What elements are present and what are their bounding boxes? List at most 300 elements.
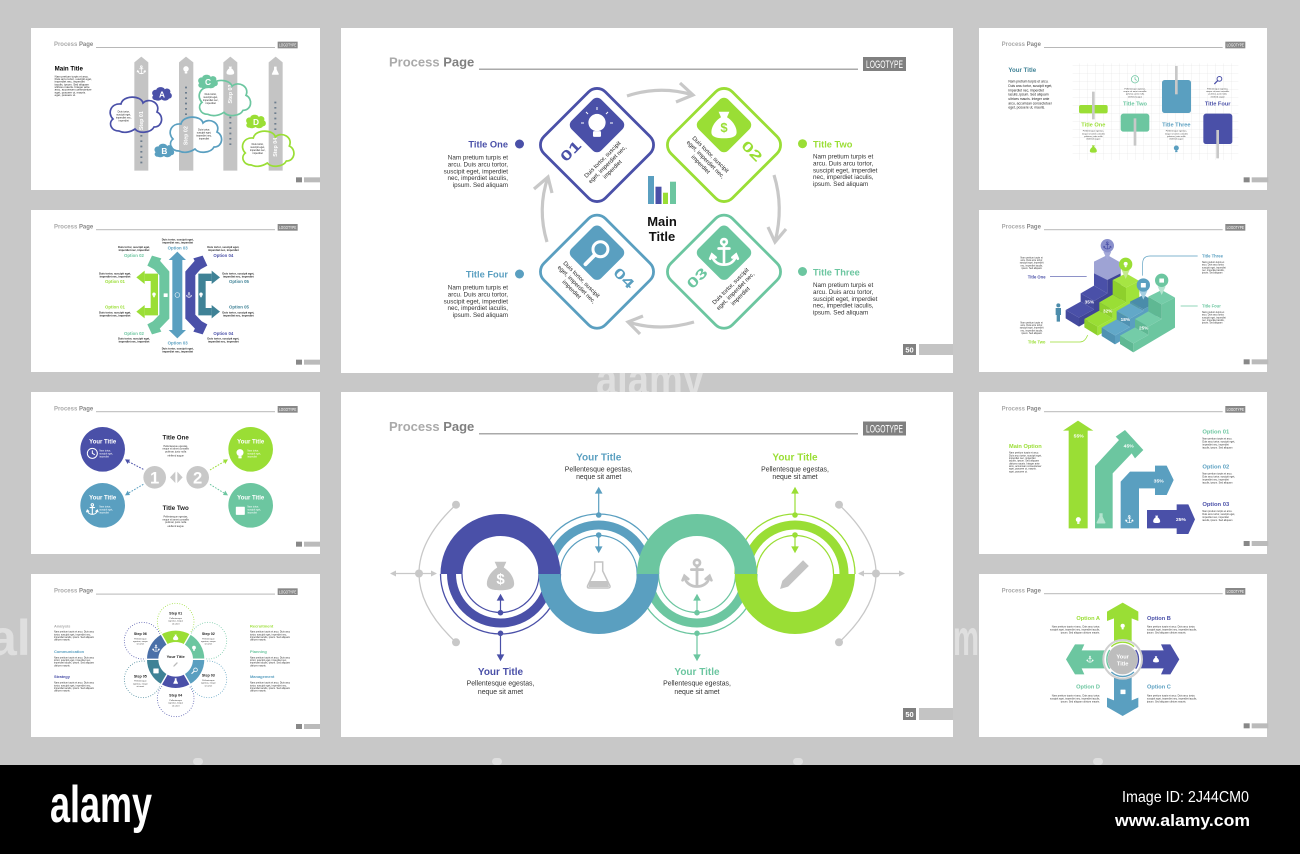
circle: blue: suscipit eget, — [99, 509, 113, 512]
option text: Duis tortor, suscipit eget, — [99, 271, 131, 275]
left text column: ultrices mauris. — [54, 690, 71, 693]
title four: ipsum. Sed aliquam — [1202, 323, 1223, 325]
left text column: Nam pretium turpis et arcu. Duis arcu — [54, 656, 95, 659]
main option: iaculis, ipsum. Sed aliquam — [1009, 460, 1039, 463]
alamy logo: alamy — [50, 776, 152, 834]
title three: suscipit eget, imperdiet — [1202, 266, 1226, 269]
arrow heads — [125, 459, 228, 495]
option labels — [105, 245, 250, 346]
title three: nec, imperdiet iaculis, — [1202, 269, 1225, 272]
header: Process Page — [1002, 406, 1042, 412]
letter badges — [152, 75, 266, 157]
side arcs — [392, 505, 903, 642]
title one: arcu. Duis arcu tortor, — [448, 162, 508, 168]
ring icons — [153, 635, 197, 684]
option 01 — [1202, 430, 1235, 450]
grid text: pulvinar, justo nulla — [1126, 93, 1145, 96]
option d: suscipit eget, imperdiet nec, imperdiet iaculis, — [1050, 697, 1100, 700]
teal bracket arrow — [202, 271, 220, 318]
title four: suscipit eget, imperdiet — [444, 298, 508, 306]
option text: imperdiet nec, imperdiet — [208, 248, 239, 252]
cloud text: Duis tortor, — [205, 93, 217, 96]
circle: purple — [80, 427, 125, 472]
website: www.alamy.com — [1114, 811, 1250, 830]
option labels: Option 01 — [105, 279, 126, 284]
header: Process Page — [1002, 588, 1042, 594]
your title text: Duis arcu tortor, suscipit eget, — [1008, 84, 1052, 88]
circle: purple: suscipit eget, — [99, 453, 113, 456]
percent labels: 25% — [1139, 325, 1149, 330]
title two: eleifend augue — [168, 525, 184, 528]
title one: neque sit amet convallis — [162, 448, 190, 451]
percent labels: 18% — [1121, 317, 1131, 322]
title four — [1202, 304, 1226, 325]
title two: suscipit eget, imperdiet — [1020, 327, 1044, 330]
title one: nec, imperdiet iaculis, — [447, 175, 508, 182]
title one: Pellentesque egestas, — [163, 445, 188, 448]
circle: purple: Your Title — [89, 440, 117, 446]
grid titles: Title One — [1081, 122, 1105, 128]
option a: suscipit eget, imperdiet nec, imperdiet iaculis, — [1050, 629, 1100, 632]
option b: Option B — [1147, 616, 1171, 622]
circle: green: Your Title — [237, 440, 265, 446]
header: LOGOTYPE — [1227, 589, 1244, 594]
diamond 04: eget, imperdiet nec, — [556, 265, 596, 305]
label: purple title: neque sit amet — [478, 689, 523, 696]
left text column: tortor, suscipit eget, imperdiet nec, — [54, 633, 91, 636]
diamond 03: 03 — [683, 264, 711, 292]
header: LOGOTYPE — [279, 589, 296, 594]
title four: ipsum. Sed aliquam — [453, 312, 508, 319]
page number: 50 — [905, 710, 914, 719]
title two: ipsum. Sed aliquam — [1021, 333, 1042, 335]
right text column — [250, 623, 291, 693]
option 01: imperdiet nec, imperdiet — [1202, 444, 1229, 447]
option text: Duis tortor, suscipit eget, — [118, 245, 150, 249]
option 02: imperdiet nec, imperdiet — [1202, 478, 1229, 481]
header: Process Page — [389, 54, 474, 70]
label: blue title — [565, 452, 633, 481]
circle: green: Nam tortor, — [247, 450, 259, 453]
header — [1002, 42, 1245, 48]
green arrow — [1063, 421, 1093, 528]
connector lines — [1050, 256, 1198, 342]
left text column: ultrices mauris. — [54, 639, 71, 642]
step labels: sit amet — [205, 684, 213, 687]
centre hub — [1103, 640, 1142, 679]
main title — [647, 214, 677, 244]
step labels: Step 05 — [134, 674, 147, 678]
left text column: ultrices mauris. — [54, 664, 71, 667]
diamond 02: $ — [720, 120, 728, 135]
cloud text: suscipit eget, — [116, 113, 131, 116]
diamond 04: 04 — [610, 264, 638, 292]
label: blue title: neque sit amet — [576, 474, 621, 481]
grid text: Pellentesque egestas, — [1207, 87, 1229, 90]
mint stairs — [1120, 290, 1175, 352]
title one: arcu. Duis arcu tortor, — [1021, 259, 1043, 262]
step labels: Pellentesque — [169, 699, 183, 702]
left text column: Nam pretium turpis et arcu. Duis arcu — [54, 682, 95, 685]
cloud text: imperdiet — [199, 137, 209, 140]
header — [54, 588, 298, 595]
diamond 01: eget, imperdiet nec, — [588, 145, 628, 185]
step labels: egestas, neque — [133, 682, 149, 685]
panel: linked rings — [341, 392, 953, 737]
right text column: Recruitment — [250, 623, 274, 628]
option text: imperdiet nec, imperdiet — [119, 340, 149, 344]
grid icons — [1090, 76, 1222, 153]
letter badges: B — [161, 146, 167, 156]
header: LOGOTYPE — [1227, 407, 1244, 412]
right text column: tortor, suscipit eget, imperdiet nec, — [250, 633, 287, 636]
main title text: ultrices mauris. Integer ante — [55, 85, 90, 89]
option 03: Nam pretium turpis et arcu. — [1202, 510, 1233, 513]
ring icons — [487, 560, 809, 590]
option 01: Option 01 — [1202, 430, 1230, 436]
watermark fragments — [0, 353, 1103, 765]
diamond 01: imperdiet — [602, 159, 624, 181]
page number — [903, 708, 953, 720]
option c — [1147, 685, 1197, 703]
watermark fragments: alamy — [596, 353, 704, 405]
page number — [296, 360, 320, 365]
grid titles: Title Three — [1162, 122, 1191, 128]
right text column: Nam pretium turpis et arcu. Duis arcu — [250, 631, 291, 634]
title two: Pellentesque egestas, — [163, 516, 188, 519]
diamond 04 — [535, 210, 659, 333]
circle: mint: Nam tortor, — [247, 506, 259, 509]
main option — [1009, 444, 1042, 473]
percent labels: 55% — [1074, 434, 1084, 440]
title one: ipsum. Sed aliquam — [453, 182, 508, 189]
header: LOGOTYPE — [866, 424, 903, 436]
label: mint title: Pellentesque egestas, — [663, 680, 731, 688]
letter badges: C — [205, 77, 211, 87]
mint bent arrow — [147, 256, 164, 334]
option a: Option A — [1076, 616, 1100, 622]
step labels: sit amet — [205, 643, 213, 646]
your title text: Your Title — [1008, 67, 1037, 74]
grid text: Pellentesque egestas, — [1083, 130, 1104, 133]
option 03 — [1202, 502, 1235, 522]
option text: Duis tortor, suscipit eget, — [99, 311, 131, 315]
label: mint title — [663, 667, 731, 696]
cloud text: suscipit eget, — [197, 131, 212, 134]
title three: arcu. Duis arcu tortor, — [813, 289, 873, 296]
grid text: eleifend augue — [1211, 96, 1226, 98]
title one: Nam pretium turpis et — [448, 154, 508, 162]
option d: Option D — [1076, 685, 1100, 691]
percent labels: 45% — [1124, 444, 1134, 450]
header: LOGOTYPE — [279, 43, 296, 48]
option text: Duis tortor, suscipit eget, — [118, 337, 150, 341]
option labels: Option 05 — [229, 279, 250, 284]
outline clouds — [110, 80, 294, 166]
main title text: arcu, accumsan consectetuer — [55, 88, 92, 92]
option text — [99, 238, 255, 353]
side nodes — [390, 501, 905, 646]
main title text: Main Title — [55, 65, 84, 72]
page number — [296, 177, 320, 182]
option text: Duis tortor, suscipit eget, — [162, 346, 194, 350]
step labels: sit amet — [137, 685, 145, 688]
title two: neque sit amet convallis — [162, 518, 190, 521]
cloud text: imperdiet nec, — [203, 99, 219, 102]
option b: Nam pretium turpis et arcu. Duis arcu tortor, — [1147, 626, 1195, 629]
main option: Main Option — [1009, 444, 1042, 450]
title two: pulvinar, justo nulla — [165, 521, 187, 524]
header: LOGOTYPE — [279, 407, 296, 412]
header — [1002, 406, 1245, 413]
main title text — [55, 65, 92, 97]
title two — [798, 139, 878, 188]
purple bent arrow — [190, 256, 207, 334]
arrow icons — [152, 292, 203, 297]
percent labels — [1085, 300, 1149, 330]
percent labels — [1074, 434, 1187, 523]
option text: imperdiet nec, imperdiet — [100, 314, 130, 318]
option labels: Option 02 — [124, 331, 145, 336]
title two: nec, imperdiet iaculis, — [813, 174, 874, 181]
panel: ten options arrows — [31, 210, 320, 372]
header — [1002, 224, 1245, 231]
title one: Title One — [163, 434, 189, 441]
option c: suscipit eget, imperdiet nec, imperdiet iaculis, — [1147, 697, 1197, 700]
main option: eget, posuere ut. — [1009, 470, 1028, 473]
option labels: Option 01 — [105, 305, 126, 310]
label: purple title: Your Title — [478, 667, 524, 678]
step labels: Pellentesque — [202, 679, 215, 682]
right text column: ultrices mauris. — [250, 639, 267, 642]
right text column: imperdiet iaculis, ipsum. Sed aliquam — [250, 636, 290, 639]
title three — [798, 267, 878, 316]
step labels: egestas, neque — [201, 640, 217, 643]
header — [54, 42, 298, 48]
grid text: Pellentesque egestas, — [1124, 87, 1146, 90]
grid text: neque sit amet convallis — [1123, 90, 1147, 93]
option text: Duis tortor, suscipit eget, — [222, 271, 255, 275]
label: mint title: Your Title — [674, 667, 720, 678]
grid text: eleifend augue — [1086, 139, 1101, 141]
option a — [1050, 616, 1100, 635]
title one: Title One — [1028, 275, 1046, 280]
numbered circles: 1 — [150, 468, 159, 487]
your title text: eget, posuere ut, mauris. — [1008, 106, 1045, 110]
grid text: pulvinar, justo nulla — [1208, 93, 1228, 96]
circle: purple: imperdiet — [99, 456, 109, 459]
circle: green — [228, 427, 273, 472]
step labels — [139, 84, 279, 157]
circle: purple: Nam tortor, — [99, 450, 111, 453]
option b — [1147, 616, 1197, 635]
page number — [296, 542, 320, 547]
page number — [1244, 541, 1268, 546]
arrow icons — [1087, 624, 1159, 694]
left text column: imperdiet iaculis, ipsum. Sed aliquam — [54, 687, 94, 690]
grey step arrows — [134, 57, 283, 171]
watermark fragments: m — [953, 610, 979, 666]
circle: mint: imperdiet — [247, 512, 257, 515]
thin ring parts — [440, 514, 855, 634]
dashed petals — [124, 603, 227, 717]
title three: ipsum. Sed aliquam — [813, 310, 868, 316]
circle: blue: Your Title — [89, 496, 117, 502]
label: green title: Pellentesque egestas, — [761, 466, 829, 474]
left text column: Strategy — [54, 674, 71, 679]
option c: Nam pretium turpis et arcu. Duis arcu tortor, — [1147, 694, 1195, 697]
option 02: Nam pretium turpis et arcu. — [1202, 472, 1233, 475]
step labels: sit amet — [172, 622, 180, 625]
grid text: pulvinar, justo nulla — [1167, 135, 1186, 138]
grid text: pulvinar, justo nulla — [1084, 135, 1103, 138]
title one: Nam pretium turpis et — [1021, 256, 1043, 259]
circle: green: suscipit eget, — [247, 453, 261, 456]
option 03: iaculis, ipsum. Sed aliquam — [1202, 519, 1232, 522]
title three: Title Three — [1202, 254, 1224, 259]
option labels: Option 03 — [168, 341, 188, 346]
pins — [1101, 239, 1168, 300]
step labels: Step 01 — [169, 612, 182, 616]
main option: imperdiet nec, imperdiet — [1009, 457, 1036, 460]
option text: imperdiet nec, imperdiet — [119, 248, 149, 252]
left text column: imperdiet iaculis, ipsum. Sed aliquam — [54, 636, 94, 639]
title two: Title Two — [1028, 339, 1046, 344]
diamond 02: imperdiet — [689, 154, 711, 176]
circle: blue: Nam tortor, — [99, 506, 111, 509]
title four: Nam pretium turpis et — [448, 284, 508, 292]
right text column: imperdiet iaculis, ipsum. Sed aliquam — [250, 662, 290, 665]
title one — [162, 434, 190, 457]
step labels — [133, 612, 217, 707]
label: purple title: Pellentesque egestas, — [467, 680, 534, 688]
step labels: Pellentesque — [134, 637, 147, 640]
cloud text: Duis tortor, — [198, 128, 210, 131]
option labels: Option 04 — [213, 253, 234, 258]
step labels: Step 02 — [184, 126, 190, 145]
cycle arrows — [534, 83, 786, 334]
option c: ipsum. Sed aliquam ultrices mauris. — [1147, 700, 1187, 703]
your title text — [1008, 67, 1053, 110]
title one: suscipit eget, imperdiet — [1020, 262, 1044, 265]
chevron columns — [141, 87, 275, 163]
diamond 03: imperdiet — [730, 286, 752, 307]
left text column: Analysis — [54, 623, 71, 628]
option 02 — [1202, 464, 1235, 484]
circle: blue: imperdiet — [99, 512, 109, 515]
cloud text: imperdiet nec, — [116, 116, 132, 119]
letter badges: D — [253, 117, 259, 127]
option labels: Option 04 — [213, 331, 234, 336]
green bracket arrow — [136, 271, 154, 318]
option d: ipsum. Sed aliquam ultrices mauris. — [1061, 700, 1100, 703]
step labels: Step 03 — [228, 84, 234, 103]
title one — [1020, 256, 1046, 280]
cloud text: imperdiet — [206, 102, 216, 105]
header: Process Page — [54, 42, 94, 48]
option a: Nam pretium turpis et arcu. Duis arcu tortor, — [1052, 626, 1100, 629]
header: Process Page — [389, 419, 474, 434]
diamond 02: Duis tortor, suscipit — [691, 136, 730, 175]
right text column: ultrices mauris. — [250, 664, 267, 667]
option 01: Nam pretium turpis et arcu. — [1202, 438, 1233, 441]
header — [54, 406, 298, 413]
title four: Title Four — [466, 270, 508, 280]
person — [1056, 303, 1061, 322]
diamond 01: 01 — [557, 137, 585, 165]
purple arrow — [1147, 504, 1195, 534]
mint arrow — [1095, 430, 1143, 528]
step labels: sit amet — [137, 643, 145, 646]
cloud text: imperdiet nec, — [250, 149, 266, 152]
step labels: Step 02 — [202, 632, 215, 636]
title three: arcu. Duis arcu tortor, — [1202, 264, 1225, 267]
title one — [444, 140, 524, 189]
option d: Nam pretium turpis et arcu. Duis arcu tortor, — [1052, 694, 1100, 697]
panel: six steps ring — [31, 574, 320, 737]
option labels: Option 05 — [229, 305, 250, 310]
cloud text: imperdiet — [119, 119, 129, 122]
label: mint title: neque sit amet — [674, 689, 720, 696]
grid titles: Title Two — [1123, 101, 1148, 107]
title four: arcu. Duis arcu tortor, — [1202, 314, 1225, 317]
diamond 04: imperdiet — [560, 279, 582, 301]
option 02: Duis arcu tortor, suscipit eget, — [1202, 475, 1235, 478]
left text column: Communication — [54, 649, 85, 654]
panel: four arrows percentages — [979, 392, 1268, 554]
option text: Duis tortor, suscipit eget, — [207, 245, 240, 249]
grid text: neque sit amet convallis — [1206, 90, 1229, 93]
option a: ipsum. Sed aliquam ultrices mauris. — [1061, 632, 1100, 635]
option 03: Option 03 — [1202, 502, 1230, 508]
panel: four circles two titles — [31, 392, 320, 554]
bar chart icon — [648, 176, 676, 204]
title four: suscipit eget, imperdiet — [1202, 316, 1226, 319]
ring arrows — [498, 488, 798, 660]
right text column: tortor, suscipit eget, imperdiet nec, — [250, 659, 287, 662]
grid text — [1082, 87, 1229, 141]
centre hub: Title — [1117, 661, 1128, 667]
title two: arcu. Duis arcu tortor, — [1021, 324, 1043, 327]
main title: Title — [649, 229, 675, 244]
diamond 02 — [662, 83, 786, 207]
title four: arcu. Duis arcu tortor, — [448, 292, 508, 298]
diamond 03: Duis tortor, suscipit — [712, 267, 751, 306]
grid text: neque sit amet convallis — [1082, 132, 1105, 135]
cloud text — [116, 93, 266, 155]
your title text: arcu, accumsan consectetuer — [1008, 101, 1053, 105]
arrow icons — [1076, 513, 1160, 524]
diamond 01 — [535, 83, 659, 207]
image id: Image ID: 2J44CM0 — [1122, 789, 1249, 806]
step labels: egestas, neque — [168, 702, 184, 705]
step labels: Step 01 — [139, 111, 145, 130]
title two: arcu. Duis arcu tortor, — [813, 160, 873, 168]
panel: process cloud steps — [31, 28, 320, 190]
percent labels: 25% — [1176, 517, 1187, 523]
main title text: Nam pretium turpis et arcu. — [55, 74, 89, 78]
step labels: egestas, neque — [168, 620, 184, 623]
numbered circles: 2 — [193, 468, 202, 487]
step labels: egestas, neque — [133, 640, 149, 643]
title three — [1202, 254, 1226, 275]
step labels: Step 04 — [169, 694, 183, 698]
option b: ipsum. Sed aliquam ultrices mauris. — [1147, 632, 1187, 635]
option 03: imperdiet nec, imperdiet — [1202, 516, 1229, 519]
header — [54, 224, 298, 231]
option text: imperdiet nec, imperdiet — [223, 274, 254, 278]
letter badges: A — [159, 89, 165, 99]
